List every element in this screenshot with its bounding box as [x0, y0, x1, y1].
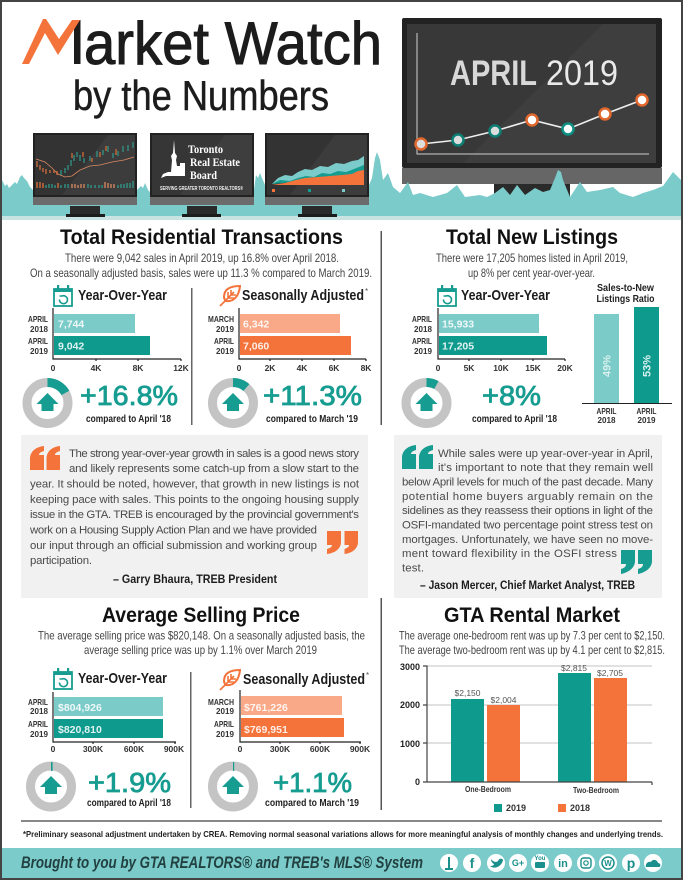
heading: Total New Listings — [446, 225, 618, 249]
bar chart: seasonally adjusted sales: 6,342 — [243, 318, 269, 330]
footer band: Brought to you by GTA REALTORS® and TREB's MLS® System — [21, 853, 423, 872]
attribution: – Jason Mercer, Chief Market Analyst, TREB — [420, 578, 635, 592]
intro text: There were 17,205 homes listed in April 2019, — [436, 252, 628, 265]
social icons: p — [627, 855, 635, 871]
intro text — [399, 630, 665, 657]
icon: CN Tower — [161, 140, 185, 178]
bar chart: seasonally adjusted price: 0 — [238, 744, 243, 754]
intro text: up 8% per cent year-over-year. — [468, 267, 595, 280]
callout: Jason Mercer quote: OSFI-mandated two percentage point stress test on — [402, 520, 653, 532]
bar chart: year-over-year sales: APRIL — [28, 336, 48, 346]
social icons: f — [470, 855, 475, 871]
bar chart: year-over-year price: 300K — [83, 744, 104, 754]
heading: Total Residential Transactions — [60, 225, 343, 249]
footer band — [2, 848, 681, 878]
bar chart: seasonally adjusted sales: 0 — [237, 363, 242, 373]
stat: +16.8% — [80, 380, 178, 411]
bar chart: sales-to-new listings ratio: APRIL — [596, 406, 616, 416]
donut: +11.3% — [212, 382, 254, 424]
intro text — [30, 252, 372, 280]
monitor: Toronto Real Estate Board logo: Real Estate — [190, 155, 241, 169]
callout: Garry Bhaura quote: The strong year-over-year growth in sales is a good news story — [69, 448, 359, 460]
skyline band — [2, 152, 681, 220]
monitor: stock chart — [33, 133, 137, 217]
bar chart: new listings: 2019 — [414, 346, 432, 356]
heading: GTA Rental Market — [444, 603, 620, 627]
big monitor: April 2019 — [402, 18, 662, 200]
bar chart: year-over-year price: 2019 — [30, 729, 48, 739]
bar chart: new listings: 17,205 — [442, 340, 474, 352]
intro text: On a seasonally adjusted basis, sales were up 11.3 % compared to March 2019. — [30, 267, 372, 280]
bar chart: rents: $2,705 — [597, 668, 623, 678]
bar chart: year-over-year price: 0 — [51, 744, 56, 754]
bar chart: new listings: 0 — [436, 363, 441, 373]
callout: Jason Mercer quote: below April levels for much of the past decade. Many — [402, 476, 653, 488]
bar chart: year-over-year price: APRIL — [28, 719, 48, 729]
panel: average selling price — [28, 603, 371, 809]
bar chart: new listings: 2018 — [414, 324, 432, 334]
bar chart: new listings: APRIL — [412, 314, 432, 324]
stat: +11.3% — [263, 380, 362, 411]
bar chart: year-over-year sales: 4K — [91, 363, 102, 373]
bar chart: year-over-year price: APRIL — [28, 697, 48, 707]
bar chart: new listings: APRIL — [412, 336, 432, 346]
bar chart: rents: Two-Bedroom — [573, 785, 619, 795]
intro text — [436, 252, 628, 280]
callout: Jason Mercer quote: While sales were up year-over-year in April, — [438, 448, 653, 460]
bar chart: rents: $2,815 — [561, 663, 587, 673]
big monitor: April 2019: APRIL — [450, 54, 537, 93]
legend: 2019 — [506, 803, 526, 813]
bar chart: seasonally adjusted sales: MARCH — [208, 314, 234, 324]
icon: calendar — [54, 668, 72, 689]
callout: Jason Mercer quote: it's important to note that they remain well — [438, 462, 653, 474]
bar chart: rents: One-Bedroom — [465, 784, 511, 794]
bar chart: seasonally adjusted sales: 4K — [297, 363, 308, 373]
icon: leaf — [220, 670, 240, 690]
stat — [263, 380, 362, 425]
icon: closing quote — [327, 531, 358, 554]
callout: Jason Mercer quote: potential home buyers arguably remain on the — [402, 491, 653, 503]
bar chart: rents: $2,004 — [490, 695, 517, 705]
heading: Average Selling Price — [102, 603, 300, 627]
donut: +8% — [406, 382, 447, 424]
callout: Garry Bhaura quote: year. It should be noted, however, that growth in new listings is not — [30, 478, 360, 490]
bar chart: rents — [400, 662, 652, 813]
subheading: Seasonally Adjusted — [242, 287, 364, 304]
bar chart: seasonally adjusted price: MARCH — [208, 697, 234, 707]
subheading: Year-Over-Year — [78, 670, 167, 687]
bar chart: seasonally adjusted sales: 6K — [329, 363, 340, 373]
stat: compared to April '18 — [86, 414, 171, 425]
stat: +1.9% — [88, 767, 171, 798]
donut: +1.1% — [212, 762, 254, 807]
icon: leaf — [220, 286, 240, 306]
header title: by the Numbers — [73, 72, 329, 119]
legend — [494, 803, 590, 813]
panel: total residential transactions — [27, 225, 372, 425]
stat: compared to March '19 — [266, 414, 358, 425]
bar chart: sales-to-new listings ratio: APRIL — [636, 406, 656, 416]
stat: compared to April '18 — [472, 414, 557, 425]
callout: Jason Mercer quote: sidelines as they reassess their options in light of the — [402, 505, 653, 517]
icon: calendar — [438, 285, 456, 306]
callout: Garry Bhaura quote: keeping pace with sales. This points to the ongoing housing supply — [30, 494, 359, 506]
bar chart: rents: 2000 — [400, 700, 420, 710]
bar chart: seasonally adjusted price: 300K — [270, 744, 291, 754]
stat: +8% — [482, 380, 541, 411]
subheading: Seasonally Adjusted — [243, 671, 365, 688]
social icons — [440, 854, 662, 872]
bar chart: year-over-year sales: 7,744 — [58, 318, 84, 330]
callout: Jason Mercer quote: test. — [402, 562, 424, 574]
monitor: Toronto Real Estate Board logo: Toronto — [188, 142, 223, 156]
callout: Garry Bhaura quote: issue in the GTA. TREB is encouraged by the provincial government's — [30, 509, 359, 521]
panel: average selling price: * — [366, 671, 369, 680]
bar chart: sales-to-new listings ratio: 53% — [642, 355, 654, 377]
bar chart: year-over-year price — [28, 692, 185, 754]
bar chart: year-over-year sales — [28, 308, 190, 373]
stat: compared to March '19 — [265, 798, 359, 809]
monitor: Toronto Real Estate Board logo — [150, 133, 254, 217]
monitor: Toronto Real Estate Board logo: SERVING GREATER TORONTO REALTORS® — [160, 185, 243, 192]
bar chart: seasonally adjusted sales: 2K — [265, 363, 276, 373]
header title — [22, 10, 382, 119]
bar chart: year-over-year sales: 12K — [173, 363, 190, 373]
callout: Jason Mercer quote: mortgages. Unfortunately, we have seen no move- — [402, 534, 653, 546]
subheading: Year-Over-Year — [78, 287, 167, 304]
bar chart: seasonally adjusted sales: 7,060 — [243, 340, 269, 352]
bar chart: seasonally adjusted sales: 2019 — [216, 324, 234, 334]
stat — [80, 380, 178, 425]
bar chart: sales-to-new listings ratio — [582, 282, 672, 425]
bar chart: seasonally adjusted price: $761,226 — [244, 702, 288, 714]
bar chart: sales-to-new listings ratio: Listings Ratio — [596, 293, 654, 305]
bar chart: year-over-year price: 900K — [164, 744, 185, 754]
bar chart: new listings: 20K — [557, 363, 574, 373]
intro text: There were 9,042 sales in April 2019, up 16.8% over April 2018. — [65, 252, 339, 265]
icon: calendar — [54, 285, 72, 306]
bar chart: year-over-year price: $804,926 — [58, 702, 102, 714]
panel: total residential transactions: * — [365, 287, 368, 296]
bar chart: year-over-year price: 2018 — [30, 706, 48, 716]
bar chart: year-over-year sales: 2018 — [30, 324, 48, 334]
big monitor: April 2019: 2019 — [546, 54, 618, 93]
bar chart: year-over-year price: $820,810 — [58, 724, 102, 736]
bar chart: new listings: 5K — [464, 363, 475, 373]
legend: 2018 — [570, 803, 590, 813]
bar chart: new listings: 10K — [493, 363, 510, 373]
panel: total new listings — [406, 225, 672, 425]
intro text: average selling price was up by 1.1% over March 2019 — [84, 644, 317, 657]
stat: +1.1% — [273, 767, 352, 798]
callout: Garry Bhaura quote: our input through an official submission and working group — [30, 540, 317, 552]
bar chart: year-over-year sales: 9,042 — [58, 340, 84, 352]
social icons: in — [558, 858, 568, 870]
intro text: The average selling price was $820,148. On a seasonally adjusted basis, the — [38, 630, 365, 642]
bar chart: seasonally adjusted sales: 2019 — [216, 346, 234, 356]
callout: Garry Bhaura quote: and likely represents some catch-up from a slow start to the — [69, 463, 359, 475]
bar chart: seasonally adjusted price — [208, 690, 371, 754]
bar chart: new listings: 15K — [525, 363, 542, 373]
donut: +1.9% — [30, 762, 72, 807]
social icons: You — [535, 856, 546, 862]
bar chart: rents: $2,150 — [454, 688, 481, 698]
social icons: W — [604, 859, 612, 868]
monitor: area chart — [265, 133, 369, 217]
bar chart: seasonally adjusted price: 600K — [310, 744, 331, 754]
header title: arket Watch — [84, 10, 382, 77]
icon: opening quote — [30, 446, 60, 470]
bar chart: sales-to-new listings ratio: 2018 — [598, 415, 616, 425]
icon: opening quote — [402, 445, 433, 469]
bar chart: seasonally adjusted sales — [208, 308, 372, 373]
bar chart: rents: 0 — [415, 777, 420, 787]
panel: GTA rental market — [399, 603, 665, 813]
bar chart: sales-to-new listings ratio: Sales-to-New — [597, 282, 655, 294]
social icons: G+ — [512, 858, 524, 868]
bar chart: seasonally adjusted price: 2019 — [216, 729, 234, 739]
callout: Garry Bhaura quote: participation. — [30, 555, 92, 567]
bar chart: seasonally adjusted price: $769,951 — [244, 724, 288, 736]
callout: Garry Bhaura quote: work on a Housing Supply Action Plan and we have provided — [29, 524, 317, 536]
bar chart: year-over-year sales: 2019 — [30, 346, 48, 356]
stat — [472, 380, 557, 425]
donut: +16.8% — [27, 382, 68, 424]
icon: closing quote — [621, 550, 652, 574]
bar chart: year-over-year sales: APRIL — [28, 314, 48, 324]
subheading: Year-Over-Year — [461, 287, 550, 304]
bar chart: sales-to-new listings ratio: 2019 — [638, 415, 656, 425]
bar chart: rents: 1000 — [400, 739, 420, 749]
stat — [265, 767, 359, 809]
bar chart: seasonally adjusted price: 900K — [350, 744, 371, 754]
bar chart: year-over-year price: 600K — [124, 744, 145, 754]
bar chart: new listings — [412, 308, 574, 373]
bar chart: year-over-year sales: 0 — [51, 363, 56, 373]
intro text — [38, 630, 365, 657]
bar chart: seasonally adjusted price: APRIL — [214, 719, 234, 729]
bar chart: seasonally adjusted sales: APRIL — [214, 336, 234, 346]
bar chart: seasonally adjusted sales: 8K — [361, 363, 372, 373]
bar chart: seasonally adjusted price: 2019 — [216, 706, 234, 716]
bar chart: new listings: 15,933 — [442, 318, 474, 330]
bar chart: year-over-year sales: 8K — [133, 363, 144, 373]
callout: Jason Mercer quote: ment toward flexibility in the OSFI stress — [402, 548, 617, 560]
monitor: Toronto Real Estate Board logo: Board — [190, 168, 217, 182]
bar chart: rents: 3000 — [400, 662, 420, 672]
bar chart: sales-to-new listings ratio: 49% — [602, 355, 614, 377]
attribution: – Garry Bhaura, TREB President — [113, 572, 277, 586]
stat: compared to April '18 — [87, 798, 171, 809]
callout: Garry Bhaura quote — [21, 435, 368, 598]
callout: Jason Mercer quote — [394, 435, 662, 598]
